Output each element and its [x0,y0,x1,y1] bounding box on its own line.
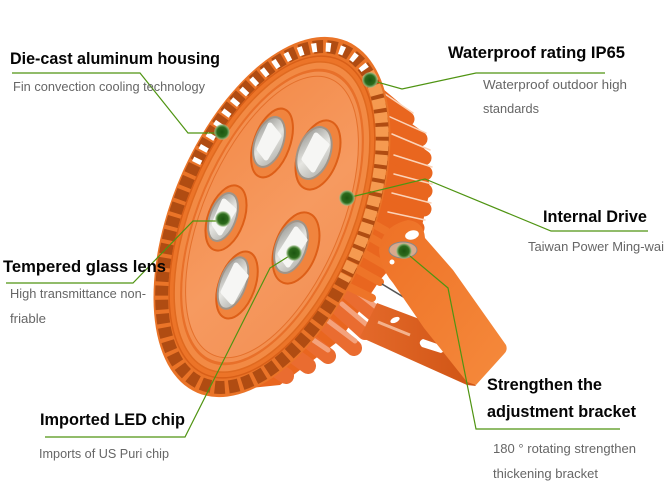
callout: strengthen the adjustment bracket [396,243,636,481]
callout: waterproof rating [362,44,627,116]
callout: tempered glass lens [3,211,231,326]
callout: strengthen the adjustment bracket: Strengthen the [487,376,602,394]
outer rim [105,2,439,432]
LED light fixture illustration [105,2,507,432]
callout: die-cast aluminum housing: Die-cast aluminum housing [10,50,220,68]
lens 2 [287,114,349,196]
lens 4 [264,206,328,290]
lens 5 [208,246,266,324]
vent ring [117,14,427,420]
callout: die-cast aluminum housing: Fin convection cooling technology [13,80,206,94]
upper left light vents [196,15,370,210]
callout: internal drive: Internal Drive [543,208,647,226]
lens 3 [197,180,255,256]
inner rings [127,26,417,408]
callout: die-cast aluminum housing [10,50,230,140]
callout: tempered glass lens: Tempered glass lens [3,258,166,276]
upper bracket arm [379,220,507,385]
light face [150,52,394,382]
callout: imported LED chip: Imported LED chip [40,411,185,429]
bracket pivot bolt [389,229,420,264]
callout: tempered glass lens: friable [10,312,46,326]
callout: waterproof rating: Waterproof outdoor high [483,78,627,92]
callout: strengthen the adjustment bracket: thickening bracket [493,467,599,481]
callout: imported LED chip [39,245,302,461]
wire behind bracket [382,284,425,322]
callout: internal drive [339,179,664,254]
lamp disc [105,2,439,432]
callout: strengthen the adjustment bracket: 180 ° rotating strengthen [493,442,636,456]
callout: waterproof rating: Waterproof rating IP65 [448,44,625,62]
lower bracket arm [360,303,476,386]
callout: imported LED chip: Imports of US Puri chip [39,447,169,461]
upper fin mass [230,85,430,390]
lens 1 [243,103,301,183]
callout: tempered glass lens: High transmittance non- [10,287,146,301]
callout: waterproof rating: standards [483,102,539,116]
callout: strengthen the adjustment bracket: adjustment bracket [487,403,636,421]
cooling fins [230,85,432,390]
right side light vents [290,73,423,280]
callout: internal drive: Taiwan Power Ming-wai [528,240,664,254]
